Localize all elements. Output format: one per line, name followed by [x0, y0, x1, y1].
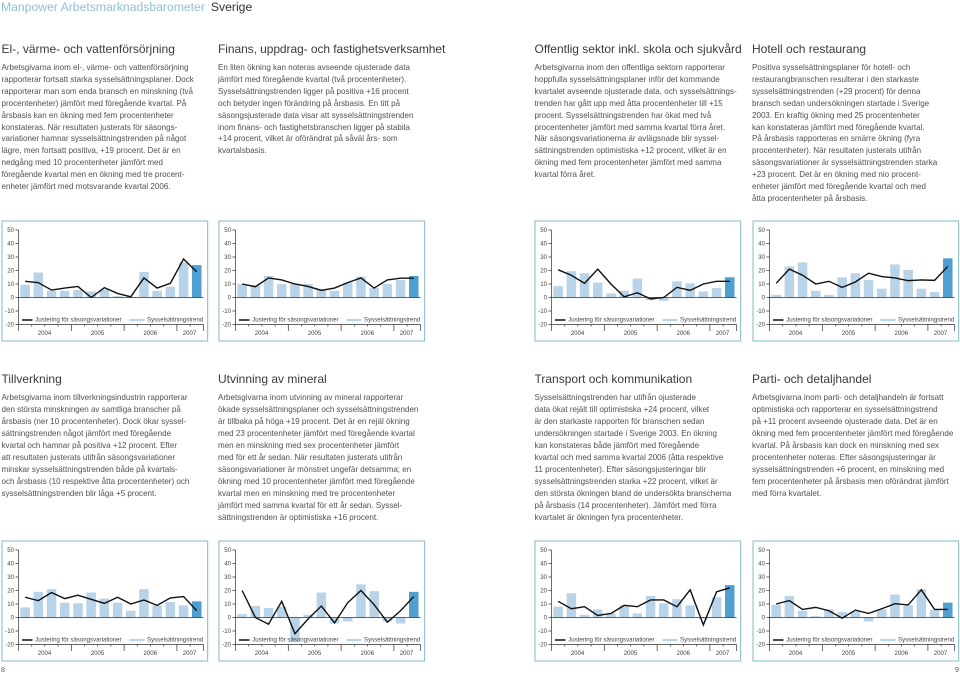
- text: El-, värme- och vattenförsörjning: föregående kvartal men en ökning med tre procent-: [2, 170, 184, 179]
- text: Parti- och detaljhandel: på +11 procent avseende ojusterade data. Det är en: [752, 417, 938, 426]
- text: Utvinning av mineral: med för ett år sedan. När resultaten justerats utifrån: [218, 453, 402, 462]
- year labels: 2005: [90, 330, 105, 337]
- axes: [548, 230, 736, 331]
- y axis labels: -10: [756, 628, 765, 635]
- chart frame: [752, 541, 958, 661]
- legend: [772, 317, 954, 324]
- year labels: 2006: [677, 330, 691, 337]
- text: Transport och kommunikation: på årsbasis (14 procentenheter). Jämfört med förra: [534, 501, 717, 510]
- legend: Justering för säsongsvariationer: [568, 637, 655, 644]
- y axis labels: -10: [756, 308, 765, 315]
- y axis labels: [756, 547, 765, 649]
- y axis labels: [222, 547, 231, 649]
- y axis labels: 40: [758, 241, 765, 248]
- chart: Offentlig sektor: [534, 220, 742, 342]
- year labels: [37, 650, 197, 657]
- chart frame: [2, 541, 207, 661]
- legend: [238, 637, 420, 644]
- text: Utvinning av mineral: men en minskning med sex procentenheter jämfört: [218, 441, 399, 450]
- text: Utvinning av mineral: [218, 393, 418, 522]
- text: Tillverkning: sättningstrenden något jämfört med föregående: [2, 429, 171, 438]
- year labels: 2004: [37, 330, 52, 337]
- text: Tillverkning: sysselsättningstrenden blir låga +5 procent.: [2, 489, 156, 498]
- axes: [766, 550, 954, 651]
- bars: [553, 585, 735, 619]
- text: Tillverkning: Arbetsgivarna inom tillverkningsindustrin rapporterar: [2, 393, 188, 402]
- year labels: 2004: [254, 650, 268, 657]
- y axis labels: 40: [224, 241, 231, 248]
- text: Transport och kommunikation: den största ökningen bland de undersökta branscherna: [534, 489, 731, 498]
- y axis labels: 50: [540, 227, 548, 234]
- y axis labels: 20: [540, 268, 548, 275]
- text: Hotell och restaurang: säsongsvariationer är sysselsättningstrenden starka: [752, 158, 937, 167]
- chart: Parti- och detaljhandel: [752, 540, 960, 662]
- y axis labels: 40: [758, 561, 765, 568]
- text: Offentlig sektor: trenden har gått upp med åtta procentenheter till +15: [534, 99, 723, 108]
- heading: Hotell och restaurang: Hotell och restaurang: [752, 42, 866, 56]
- year labels: 2005: [841, 330, 855, 337]
- y axis labels: 0: [544, 295, 548, 302]
- text: Utvinning av mineral: säsongsvariationer är mönstret ungefär detsamma; en: [218, 465, 411, 474]
- text: Offentlig sektor: [534, 63, 737, 179]
- year labels: 2005: [624, 330, 638, 337]
- y axis labels: 30: [758, 254, 765, 261]
- y axis labels: 30: [7, 254, 14, 261]
- text: Parti- och detaljhandel: Arbetsgivarna inom parti- och detaljhandeln är fortsatt: [752, 393, 943, 402]
- text: El-, värme- och vattenförsörjning: enheter jämfört med motsvarande kvartal 2006.: [2, 182, 171, 191]
- text: Finans, uppdrag- och fastighetsverksamhet: säsongsjusterade data visar att sysselsättningstrenden: [218, 111, 413, 120]
- legend: Justering för säsongsvariationer: [35, 637, 121, 644]
- chart: Hotell och restaurang: [752, 220, 960, 342]
- text: Transport och kommunikation: kvartalet är ökningen fyra procentenheter.: [534, 513, 683, 522]
- text: Finans, uppdrag- och fastighetsverksamhet: +14 procent, vilket är oförändrat på såväl års- som: [218, 134, 398, 143]
- y axis labels: 10: [7, 281, 14, 288]
- text: Offentlig sektor: procentenheter jämfört med samma kvartal förra året.: [534, 123, 725, 132]
- text: Utvinning av mineral: med 23 procentenheter jämfört med föregående kvartal: [218, 429, 415, 438]
- y axis labels: 10: [224, 281, 231, 288]
- year labels: 2005: [90, 650, 105, 657]
- legend: [555, 317, 736, 324]
- y axis labels: 30: [540, 574, 548, 581]
- legend: Sysselsättningstrend: [147, 317, 203, 324]
- chart: Transport och kommunikation: [534, 540, 742, 662]
- text: Transport och kommunikation: är den starkaste rapporten för branschen sedan: [534, 417, 704, 426]
- trend line: [242, 278, 413, 291]
- y axis labels: 10: [758, 601, 765, 608]
- y axis labels: 0: [10, 295, 14, 302]
- text: Parti- och detaljhandel: sysselsättningstrenden +6 procent, en minskning med: [752, 465, 944, 474]
- y axis labels: -10: [538, 308, 548, 315]
- legend: Justering för säsongsvariationer: [252, 317, 338, 324]
- y axis labels: 0: [544, 615, 548, 622]
- heading: Transport och kommunikation: Transport och kommunikation: [534, 372, 692, 386]
- text: Finans, uppdrag- och fastighetsverksamhet: och betyder ingen förändring på årsbasis. En titt på: [218, 99, 400, 108]
- year labels: 2006: [894, 650, 908, 657]
- year labels: 2007: [716, 650, 730, 657]
- y axis labels: 40: [540, 241, 548, 248]
- y axis labels: 20: [7, 588, 14, 595]
- year labels: 2007: [933, 330, 947, 337]
- heading: Parti- och detaljhandel: Parti- och detaljhandel: [752, 372, 871, 386]
- text: Transport och kommunikation: [534, 393, 732, 522]
- y axis labels: 50: [224, 547, 231, 554]
- text: El-, värme- och vattenförsörjning: konstateras. När resultaten justerats för säsongs-: [2, 123, 177, 132]
- axes: [232, 550, 420, 651]
- year labels: 2007: [399, 650, 413, 657]
- text: Finans, uppdrag- och fastighetsverksamhet: jämfört med föregående kvartal (två procentenheter).: [218, 75, 406, 84]
- legend: Sysselsättningstrend: [147, 637, 203, 644]
- chart: El-, värme- och vattenförsörjning: [1, 220, 208, 342]
- y axis labels: 50: [758, 547, 765, 554]
- year labels: [571, 650, 730, 657]
- chart frame: [535, 541, 741, 661]
- y axis labels: 40: [540, 561, 548, 568]
- chart frame: [535, 221, 741, 341]
- chart frame: [218, 541, 424, 661]
- text: El-, värme- och vattenförsörjning: lägre, men fortsatt positiva, +19 procent. Det är en: [2, 146, 181, 155]
- text: Offentlig sektor: När säsongsvariationerna är avlägsnade blir syssel-: [534, 134, 719, 143]
- chart: Finans, uppdrag- och fastighetsverksamhet: [218, 220, 426, 342]
- text: Parti- och detaljhandel: kvartal. På årsbasis kan dock en minskning med sex: [752, 441, 939, 450]
- year labels: 2004: [788, 330, 802, 337]
- text: Utvinning av mineral: kvartal men en minskning med tre procentenheter: [218, 489, 395, 498]
- y axis labels: 20: [758, 588, 765, 595]
- text: Finans, uppdrag- och fastighetsverksamhet: inom finans- och fastighetsbranschen ligger på stabila: [218, 123, 410, 132]
- text: Hotell och restaurang: åtta procentenheter på årsbasis.: [752, 194, 867, 203]
- text: Offentlig sektor: sättningstrenden optimistiska +12 procent, vilket är en: [534, 146, 727, 155]
- chart frame: [2, 221, 207, 341]
- text: Parti- och detaljhandel: med förra kvartalet.: [752, 489, 821, 498]
- y axis labels: 30: [224, 254, 231, 261]
- text: Finans, uppdrag- och fastighetsverksamhet: Sysselsättningstrenden ligger på positiva +16 procent: [218, 87, 409, 96]
- year labels: 2007: [182, 330, 197, 337]
- heading: Tillverkning: Tillverkning: [2, 372, 62, 386]
- axes: [766, 230, 954, 331]
- year labels: [788, 650, 947, 657]
- y axis labels: -20: [222, 322, 231, 329]
- y axis labels: 20: [540, 588, 548, 595]
- text: El-, värme- och vattenförsörjning: nedgång med 10 procentenheter jämfört med: [2, 158, 163, 167]
- y axis labels: 20: [224, 588, 231, 595]
- legend: Sysselsättningstrend: [898, 637, 954, 644]
- text: Utvinning av mineral: ökade sysselsättningsplaner och sysselsättningstrenden: [218, 405, 418, 414]
- text: Transport och kommunikation: kan konstateras både jämfört med föregående: [534, 441, 699, 450]
- text: Hotell och restaurang: sysselsättningstrenden (+29 procent) för denna: [752, 87, 920, 96]
- chart: Utvinning av mineral: [218, 540, 426, 662]
- trend line: [242, 590, 413, 634]
- bars: [771, 589, 952, 622]
- y axis labels: -10: [222, 308, 231, 315]
- text: Offentlig sektor: ökning med fem procentenheter jämfört med samma: [534, 158, 721, 167]
- y axis labels: -10: [5, 308, 14, 315]
- text: Finans, uppdrag- och fastighetsverksamhet: En liten ökning kan noteras avseende ojusterade data: [218, 63, 410, 72]
- text: Utvinning av mineral: ökning med 10 procentenheter jämfört med föregående: [218, 477, 415, 486]
- text: Transport och kommunikation: data ökat rejält till optimistiska +24 procent, vilket: [534, 405, 709, 414]
- trend line: [25, 259, 196, 298]
- y axis labels: 50: [540, 547, 548, 554]
- y axis labels: [5, 227, 14, 329]
- text: El-, värme- och vattenförsörjning: variationer hamnar sysselsättningstrenden på något: [2, 134, 186, 143]
- title: Manpower Arbetsmarknadsbarometer Sverige: [1, 0, 252, 14]
- text: Hotell och restaurang: enheter jämfört med föregående kvartal och med: [752, 182, 926, 191]
- y axis labels: -10: [222, 628, 231, 635]
- y axis labels: 10: [7, 601, 14, 608]
- legend: Justering för säsongsvariationer: [786, 317, 872, 324]
- y axis labels: 50: [758, 227, 765, 234]
- y axis labels: 30: [7, 574, 14, 581]
- heading: Utvinning av mineral: Utvinning av mineral: [218, 372, 327, 386]
- text: Hotell och restaurang: restaurangbranschen resulterar i den starkaste: [752, 75, 919, 84]
- text: Offentlig sektor: Arbetsgivarna inom den offentliga sektorn rapporterar: [534, 63, 725, 72]
- legend: Justering för säsongsvariationer: [35, 317, 121, 324]
- y axis labels: 30: [540, 254, 548, 261]
- trend line: [558, 588, 730, 625]
- page number 9: 9: [955, 667, 959, 674]
- text: Tillverkning: kvartal och hamnar på positiva +12 procent. Efter: [2, 441, 177, 450]
- text: Tillverkning: och årsbasis (10 respektive åtta procentenheter) och: [2, 477, 189, 486]
- y axis labels: [756, 227, 765, 329]
- y axis labels: 50: [7, 227, 14, 234]
- bars: [20, 263, 201, 298]
- year labels: 2006: [360, 650, 374, 657]
- text: Transport och kommunikation: 11 procentenheter). Efter säsongsjusteringar blir: [534, 465, 706, 474]
- y axis labels: [222, 227, 231, 329]
- year labels: 2005: [841, 650, 855, 657]
- y axis labels: -20: [222, 642, 231, 649]
- chart frame: [752, 221, 958, 341]
- y axis labels: 0: [761, 295, 765, 302]
- legend: [22, 637, 203, 644]
- text: Tillverkning: att resultaten justerats utifrån säsongsvariationer: [2, 453, 175, 462]
- year labels: 2006: [143, 330, 157, 337]
- text: Offentlig sektor: procent. Sysselsättningstrenden har ökat med två: [534, 111, 711, 120]
- legend: Justering för säsongsvariationer: [252, 637, 338, 644]
- year labels: 2006: [360, 330, 374, 337]
- text: Parti- och detaljhandel: [752, 393, 953, 498]
- year labels: 2005: [307, 330, 321, 337]
- text: Utvinning av mineral: Arbetsgivarna inom utvinning av mineral rapporterar: [218, 393, 403, 402]
- y axis labels: 0: [761, 615, 765, 622]
- y axis labels: -20: [5, 322, 14, 329]
- heading: El-, värme- och vattenförsörjning: El-, värme- och vattenförsörjning: [2, 42, 175, 56]
- text: Hotell och restaurang: 2003. En kraftig ökning med 25 procentenheter: [752, 111, 920, 120]
- text: Tillverkning: [2, 393, 189, 498]
- y axis labels: 0: [227, 295, 231, 302]
- y axis labels: -20: [538, 322, 548, 329]
- year labels: 2004: [254, 330, 268, 337]
- chart: Tillverkning: [1, 540, 208, 662]
- y axis labels: -10: [5, 628, 14, 635]
- text: Parti- och detaljhandel: procentenheter noteras. Efter säsongsjusteringar är: [752, 453, 936, 462]
- y axis labels: 10: [540, 281, 548, 288]
- legend: [238, 317, 420, 324]
- text: El-, värme- och vattenförsörjning: procentenheter) jämfört med föregående kvartal. På: [2, 99, 186, 108]
- text: Offentlig sektor: kvartal förra året.: [534, 170, 595, 179]
- y axis labels: -20: [538, 642, 548, 649]
- legend: [772, 637, 954, 644]
- legend: Sysselsättningstrend: [680, 637, 736, 644]
- axes: [548, 550, 736, 651]
- year labels: 2007: [399, 330, 413, 337]
- text: Parti- och detaljhandel: ökning med fem procentenheter jämfört med föregående: [752, 429, 953, 438]
- axes: [15, 230, 203, 331]
- text: Tillverkning: den största minskningen av samtliga branscher på: [2, 405, 181, 414]
- text: Transport och kommunikation: kvartal och med samma kvartal 2006 (åtta respektive: [534, 453, 723, 462]
- y axis labels: 10: [224, 601, 231, 608]
- text: Utvinning av mineral: är tillbaka på höga +19 procent. Det är en rejäl ökning: [218, 417, 410, 426]
- text: Hotell och restaurang: [752, 63, 938, 203]
- text: Hotell och restaurang: procentenheter). När resultaten justerats utifrån: [752, 146, 921, 155]
- text: Hotell och restaurang: kan konstateras jämfört med föregående kvartal.: [752, 123, 925, 132]
- year labels: 2004: [571, 330, 585, 337]
- year labels: 2004: [571, 650, 585, 657]
- legend: Sysselsättningstrend: [680, 317, 736, 324]
- y axis labels: 50: [224, 227, 231, 234]
- text: Parti- och detaljhandel: fem procentenheter på årsbasis men oförändrat jämfört: [752, 477, 949, 486]
- y axis labels: [538, 547, 548, 649]
- trend line: [558, 269, 730, 299]
- y axis labels: 30: [224, 574, 231, 581]
- year labels: [254, 330, 413, 337]
- axes: [15, 550, 203, 651]
- text: El-, värme- och vattenförsörjning: årsbasis kan en ökning med fem procentenheter: [2, 111, 174, 120]
- text: El-, värme- och vattenförsörjning: rapporterar fortsatt starka sysselsättningsplaner. Dock: [2, 75, 194, 84]
- text: Offentlig sektor: hoppfulla sysselsättningsplaner inför det kommande: [534, 75, 720, 84]
- text: Utvinning av mineral: jämfört med samma kvartal för ett år sedan. Syssel-: [218, 501, 402, 510]
- text: Utvinning av mineral: sättningstrenden är optimistiska +16 procent.: [218, 513, 378, 522]
- y axis labels: -10: [538, 628, 548, 635]
- text: Tillverkning: minskar sysselsättningstrenden både på kvartals-: [2, 465, 178, 474]
- bars: [771, 259, 952, 298]
- y axis labels: 30: [758, 574, 765, 581]
- year labels: 2007: [182, 650, 197, 657]
- text: Hotell och restaurang: +23 procent. Det är en ökning med nio procent-: [752, 170, 921, 179]
- chart frame: [218, 221, 424, 341]
- y axis labels: 0: [10, 615, 14, 622]
- legend: [22, 317, 203, 324]
- year labels: 2005: [624, 650, 638, 657]
- bars: [237, 276, 418, 298]
- y axis labels: 20: [7, 268, 14, 275]
- year labels: [571, 330, 730, 337]
- trend line: [776, 590, 947, 618]
- y axis labels: -20: [756, 642, 765, 649]
- year labels: [37, 330, 197, 337]
- legend: Justering för säsongsvariationer: [568, 317, 655, 324]
- text: Parti- och detaljhandel: optimistiska och rapporterar en sysselsättningstrend: [752, 405, 938, 414]
- trend line: [25, 593, 196, 611]
- axes: [232, 230, 420, 331]
- year labels: [788, 330, 947, 337]
- year labels: 2006: [143, 650, 157, 657]
- legend: Sysselsättningstrend: [898, 317, 954, 324]
- text: Tillverkning: årsbasis (ner 10 procentenheter). Dock ökar syssel-: [2, 417, 186, 426]
- text: Transport och kommunikation: sysselsättningstrenden starka +22 procent, vilket är: [534, 477, 718, 486]
- year labels: 2007: [933, 650, 947, 657]
- legend: Sysselsättningstrend: [364, 637, 420, 644]
- text: El-, värme- och vattenförsörjning: rapporterar man som enda bransch en minskning (två: [2, 87, 193, 96]
- text: El-, värme- och vattenförsörjning: [2, 63, 194, 191]
- y axis labels: 10: [540, 601, 548, 608]
- bars: [237, 584, 418, 642]
- heading: Offentlig sektor: Offentlig sektor inkl. skola och sjukvård: [534, 42, 742, 56]
- year labels: 2004: [37, 650, 52, 657]
- text: El-, värme- och vattenförsörjning: Arbetsgivarna inom el-, värme- och vattenförsörjning: [2, 63, 188, 72]
- y axis labels: 40: [7, 241, 14, 248]
- year labels: 2006: [677, 650, 691, 657]
- y axis labels: 0: [227, 615, 231, 622]
- text: Hotell och restaurang: bransch sedan undersökningen startade i Sverige: [752, 99, 929, 108]
- y axis labels: -20: [756, 322, 765, 329]
- legend: [555, 637, 736, 644]
- year labels: [254, 650, 413, 657]
- legend: Justering för säsongsvariationer: [786, 637, 872, 644]
- y axis labels: 50: [7, 547, 14, 554]
- text: Offentlig sektor: kvartalet avseende ojusterade data, och sysselsättnings-: [534, 87, 737, 96]
- y axis labels: [538, 227, 548, 329]
- bars: [20, 589, 201, 618]
- y axis labels: 40: [224, 561, 231, 568]
- text: Finans, uppdrag- och fastighetsverksamhet: [218, 63, 413, 155]
- year labels: 2007: [716, 330, 730, 337]
- page number 8: 8: [1, 667, 5, 674]
- text: Hotell och restaurang: Positiva sysselsättningsplaner för hotell- och: [752, 63, 910, 72]
- legend: Sysselsättningstrend: [364, 317, 420, 324]
- bars: [553, 271, 735, 301]
- heading: Finans, uppdrag- och fastighetsverksamhet: Finans, uppdrag- och fastighetsverksamhet: [218, 42, 445, 56]
- y axis labels: [5, 547, 14, 649]
- y axis labels: 10: [758, 281, 765, 288]
- year labels: 2005: [307, 650, 321, 657]
- text: Transport och kommunikation: undersökningen startade i Sverige 2003. En ökning: [534, 429, 717, 438]
- y axis labels: 20: [224, 268, 231, 275]
- text: Finans, uppdrag- och fastighetsverksamhet: kvartalsbasis.: [218, 146, 267, 155]
- year labels: 2006: [894, 330, 908, 337]
- text: Hotell och restaurang: På årsbasis rapporteras en smärre ökning (fyra: [752, 134, 920, 143]
- text: Transport och kommunikation: Sysselsättningstrenden har utifrån ojusterade: [534, 393, 696, 402]
- y axis labels: 20: [758, 268, 765, 275]
- y axis labels: 40: [7, 561, 14, 568]
- y axis labels: -20: [5, 642, 14, 649]
- trend line: [776, 267, 947, 288]
- year labels: 2004: [788, 650, 802, 657]
